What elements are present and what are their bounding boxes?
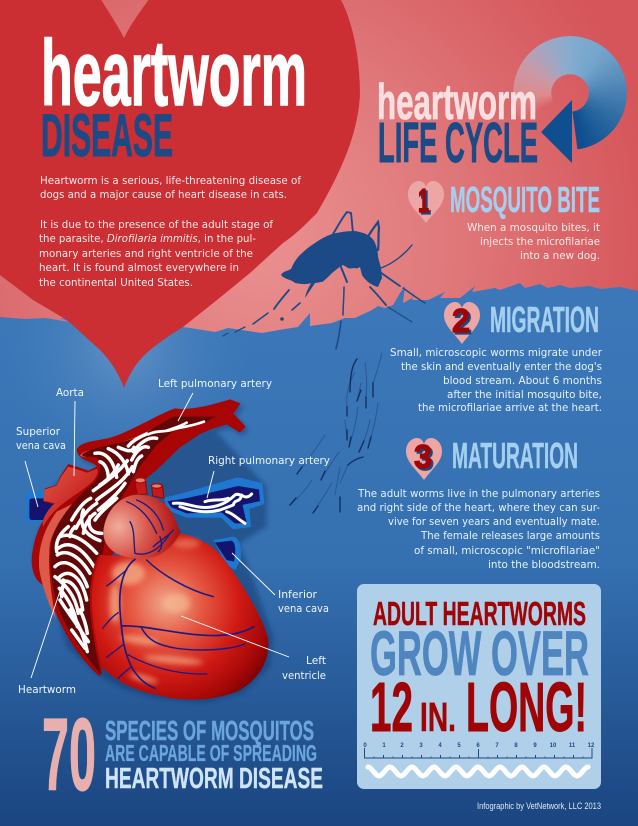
label: left pulmonary artery	[158, 377, 272, 421]
background: blue lower with torn edge	[0, 270, 638, 826]
white worm	[368, 767, 588, 776]
icon: heart number 2	[444, 302, 480, 344]
label: left pulmonary artery: Left pulmonary artery	[158, 377, 272, 390]
ruler: 12	[588, 743, 595, 749]
step text	[390, 346, 602, 414]
step text: Small, microscopic worms migrate under	[390, 346, 602, 359]
intro text: the parasite, Dirofilaria immitis, in the pul-	[39, 232, 256, 245]
label: inferior vena cava: vena cava	[278, 602, 329, 615]
heart illustration	[26, 399, 273, 703]
ruler: 11	[569, 743, 576, 749]
icon: heart number 2: 2	[454, 304, 472, 341]
step text: after the initial mosquito bite,	[447, 388, 602, 401]
step text: injects the microfilariae	[480, 235, 600, 248]
icon: heart number 1: 1	[420, 184, 431, 221]
ruler: 0	[363, 743, 367, 749]
inferior vena cava	[213, 537, 241, 570]
label: left ventricle	[181, 616, 327, 682]
step text: the skin and eventually enter the dog's	[401, 360, 602, 373]
label: heartworm	[18, 585, 76, 696]
stat text	[105, 715, 323, 795]
ruler: 7	[495, 743, 499, 749]
ventricle	[91, 533, 268, 699]
step text: and right side of the heart, where they can sur-	[357, 501, 600, 514]
stat text: HEARTWORM DISEASE	[105, 763, 323, 795]
heading: heartworm life cycle	[377, 74, 538, 175]
label: left ventricle: ventricle	[282, 669, 326, 682]
ruler: 6	[476, 743, 480, 749]
label: aorta	[56, 386, 84, 476]
intro text: It is due to the presence of the adult stage of	[40, 218, 274, 231]
intro text: dogs and a major cause of heart disease in cats.	[40, 188, 287, 201]
small vessels on top	[135, 478, 164, 498]
light bands	[110, 539, 203, 685]
step text: The female releases large amounts	[420, 529, 600, 542]
label: right pulmonary artery: Right pulmonary artery	[208, 454, 330, 467]
step text: blood stream. About 6 months	[443, 374, 602, 387]
icon: heart number 3: 3	[414, 438, 432, 475]
step 1: mosquito bite	[408, 179, 601, 262]
intro text: the continental United States.	[39, 276, 193, 289]
ruler: 4	[438, 743, 442, 749]
auricle	[103, 495, 181, 558]
intro text: heart. It is found almost everywhere in	[39, 261, 239, 274]
icon: heart number 3	[406, 438, 442, 480]
coronary veins	[103, 500, 254, 688]
stat text: ARE CAPABLE OF SPREADING	[105, 740, 317, 766]
label: right pulmonary artery	[207, 454, 330, 498]
step text: The adult worms live in the pulmonary arteries	[357, 487, 600, 500]
label: heartworm: Heartworm	[18, 683, 76, 696]
intro text	[39, 174, 302, 289]
label: superior vena cava: vena cava	[16, 439, 66, 452]
heartworms	[55, 422, 204, 652]
aorta and left pulmonary artery	[32, 399, 246, 677]
label: inferior vena cava	[232, 553, 329, 615]
intro text: monary arteries and right ventricle of the	[39, 247, 253, 260]
ruler: 3	[419, 743, 423, 749]
superior vena cava	[26, 492, 59, 522]
intro text: Heartworm is a serious, life-threatening disease of	[40, 174, 302, 187]
title: disease: DISEASE	[41, 102, 173, 169]
step text: vive for seven years and eventually mate.	[388, 515, 600, 528]
icon: heart number 3: 3	[416, 440, 434, 477]
credit: Infographic by VetNetwork, LLC 2013	[477, 801, 601, 811]
stat: 70 species	[42, 697, 323, 812]
icon: life cycle arrow	[513, 36, 627, 163]
heading: heartworm life cycle: heartworm	[377, 74, 537, 130]
ruler: 1	[382, 743, 386, 749]
step text: into a new dog.	[520, 249, 600, 262]
icon: heart number 1: 1	[418, 182, 429, 219]
step text: the microfilariae arrive at the heart.	[418, 401, 602, 414]
12 in. long: IN.	[420, 694, 456, 740]
step text: into the bloodstream.	[488, 558, 600, 571]
pulmonary highlight	[80, 425, 157, 457]
ruler: 9	[533, 743, 537, 749]
step text	[357, 487, 600, 571]
worms under skin	[290, 353, 382, 513]
aorta highlight	[43, 467, 98, 527]
big red heart	[0, 0, 360, 388]
lumen	[50, 417, 215, 675]
icon: heart number 2: 2	[452, 302, 470, 339]
label: aorta: Aorta	[56, 386, 84, 399]
title: heartworm: heartworm	[41, 21, 307, 125]
label: left ventricle: Left	[306, 654, 327, 667]
background: pink upper	[0, 0, 638, 340]
ruler: 8	[514, 743, 518, 749]
shadow	[33, 403, 273, 703]
label: superior vena cava	[16, 425, 66, 507]
label: inferior vena cava: Inferior	[278, 588, 317, 601]
12 in. long	[370, 668, 587, 746]
ruler: 10	[550, 743, 557, 749]
label: superior vena cava: Superior	[16, 425, 60, 438]
icon: heart number 1	[408, 181, 444, 223]
right pulmonary artery	[165, 478, 263, 528]
ruler	[363, 743, 595, 758]
callout: adult heartworms	[357, 584, 601, 789]
ruler: 5	[457, 743, 461, 749]
aorta side band	[39, 503, 75, 620]
ventricle side rim	[91, 555, 102, 672]
step text: When a mosquito bites, it	[467, 221, 601, 234]
stat: 70 species: 70	[42, 697, 96, 812]
step text	[467, 221, 601, 262]
step 2: migration	[390, 299, 602, 414]
stat text: SPECIES OF MOSQUITOS	[105, 715, 314, 746]
icon: mosquito silhouette	[223, 212, 425, 349]
12 in. long: 12	[370, 668, 413, 746]
step 3: maturation	[357, 435, 600, 571]
ruler: 2	[400, 743, 404, 749]
step text: of small, microscopic "microfilariae"	[414, 544, 600, 557]
